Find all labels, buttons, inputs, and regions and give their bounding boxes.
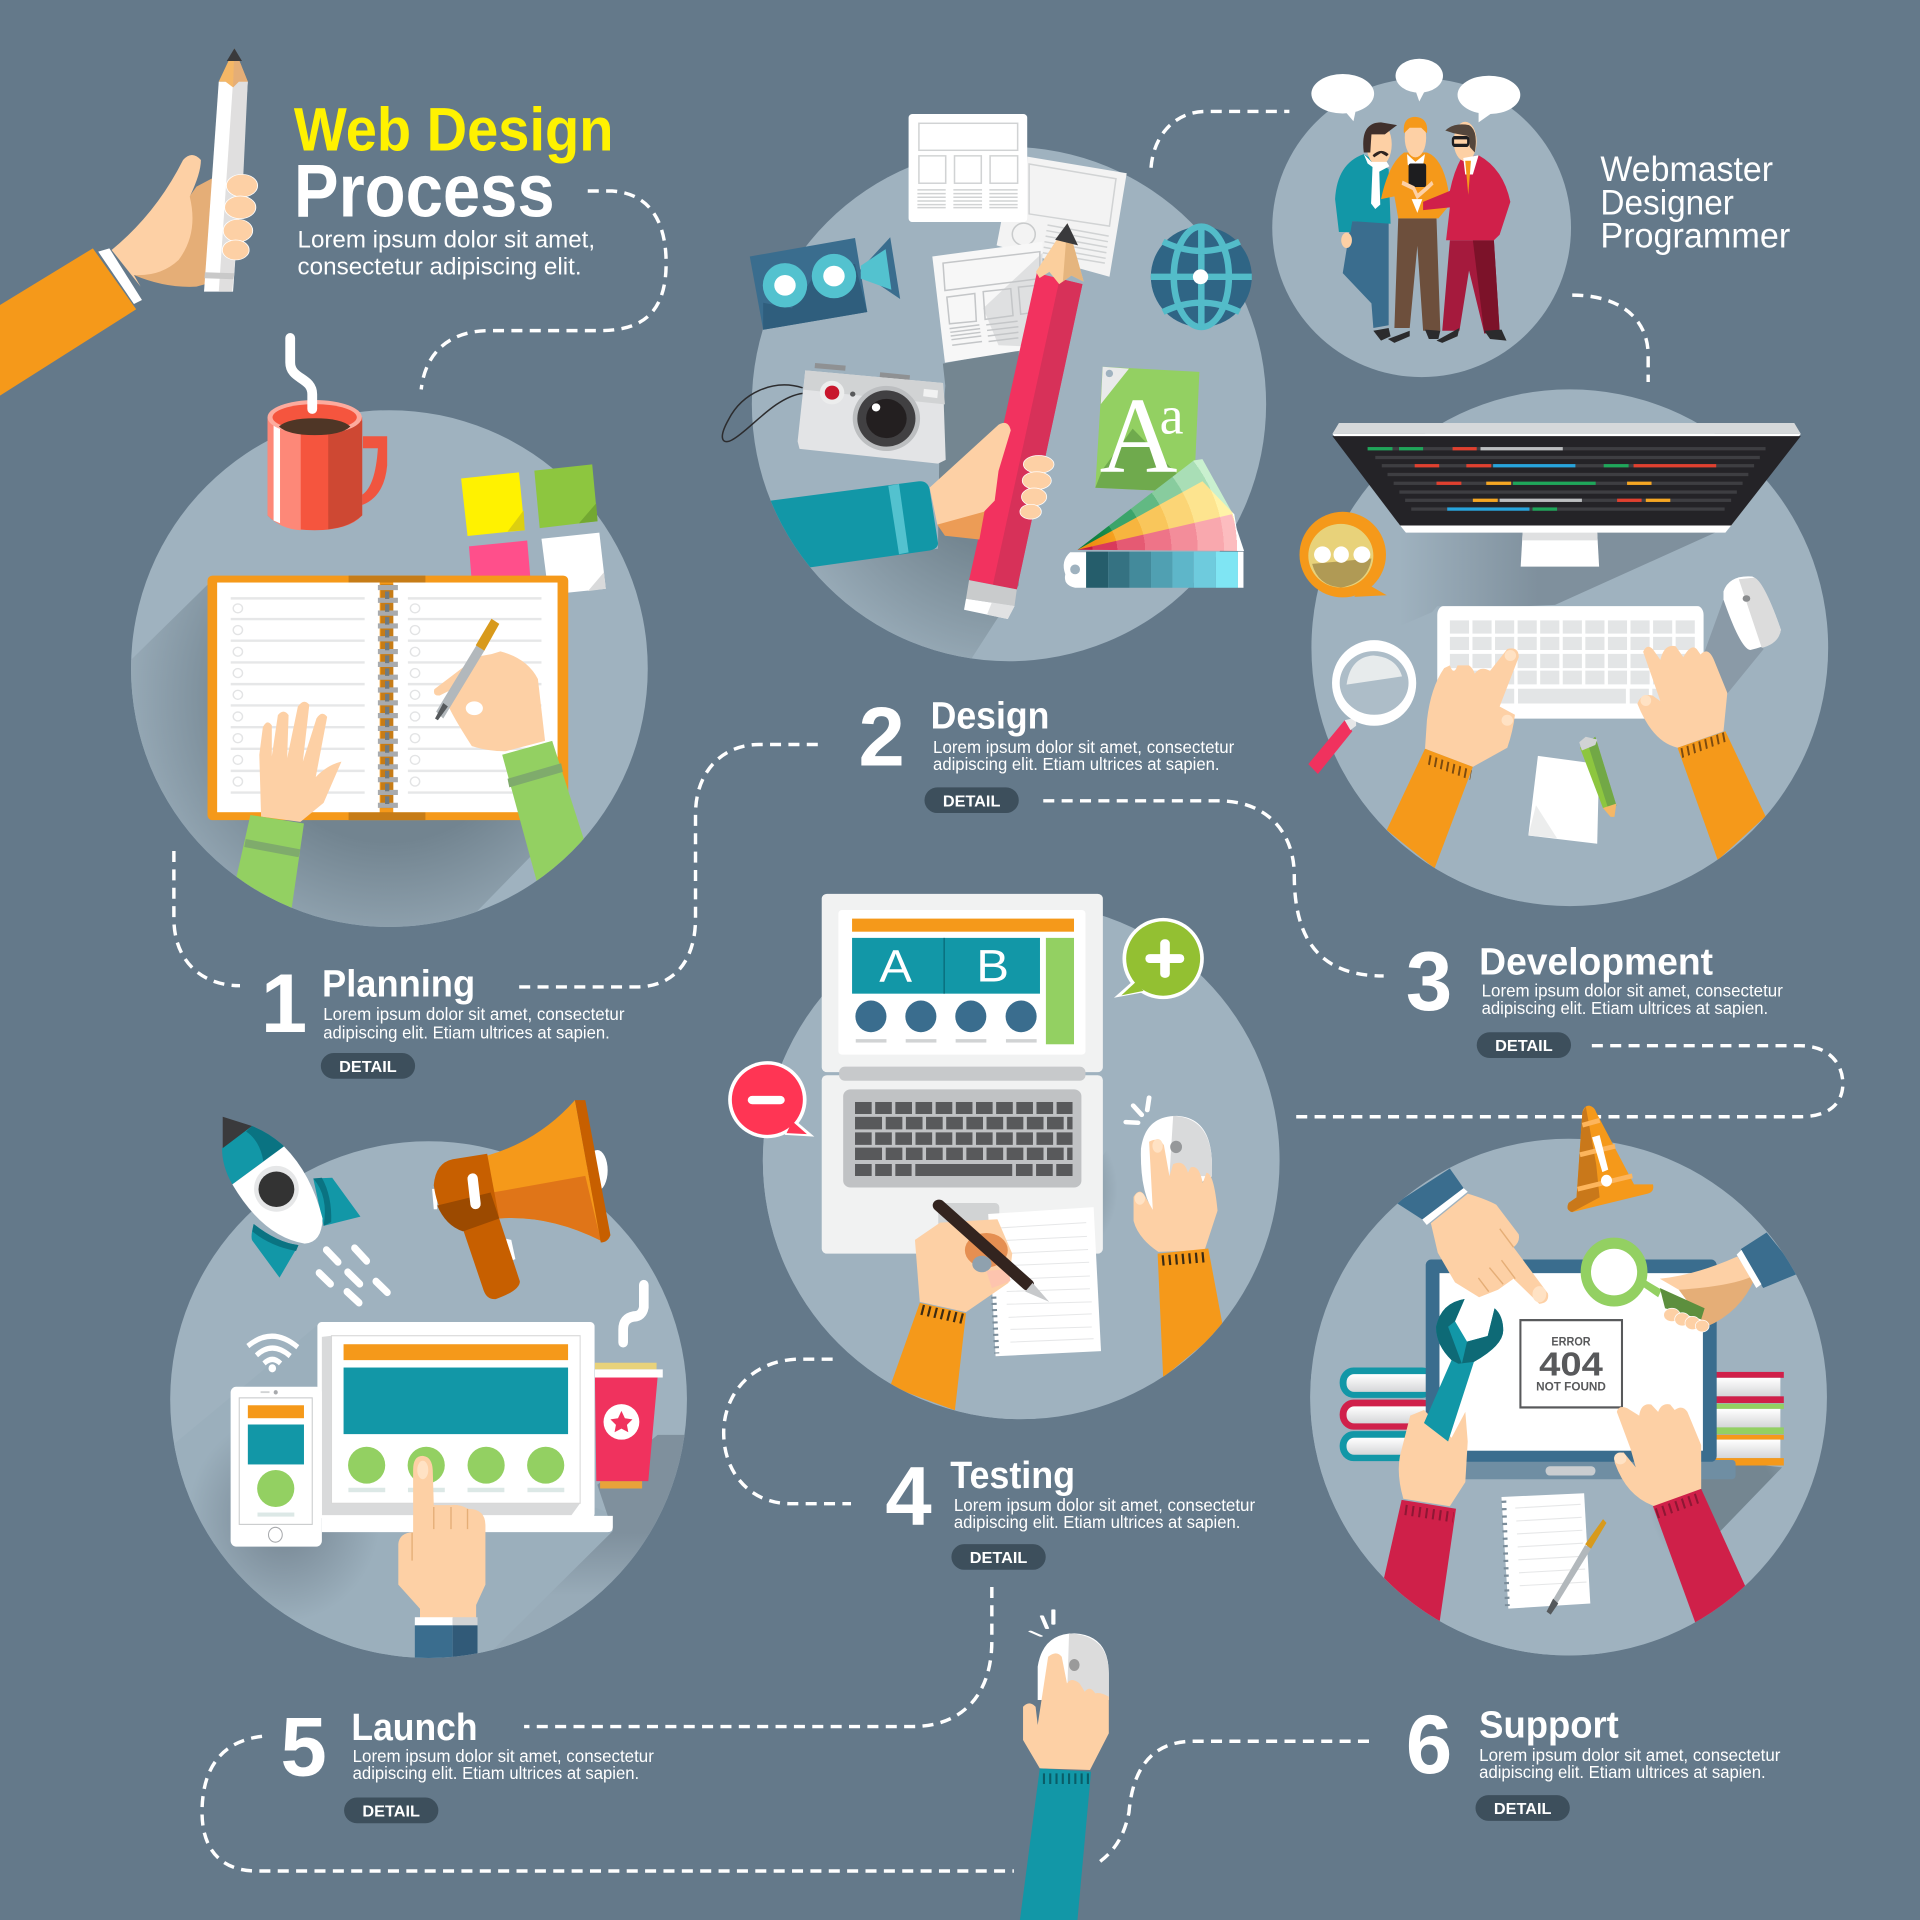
- icon: keyboard: [1437, 606, 1704, 719]
- title: Lorem ipsum dolor sit amet,: [298, 226, 595, 253]
- title: Web Design: [294, 96, 613, 164]
- icon: hand with magnifier: [1586, 1232, 1799, 1332]
- icon: computer mouse: [1723, 576, 1781, 650]
- step 5: launch: adipiscing elit. Etiam ultrices at sapien.: [353, 1763, 639, 1783]
- step 2: design: 2: [858, 690, 905, 783]
- step 6: support: Support: [1479, 1705, 1619, 1747]
- icon: minus bubble: [728, 1061, 814, 1138]
- step 4: testing: DETAIL: [970, 1550, 1028, 1567]
- icon: typography card: [1095, 367, 1199, 495]
- roles text: Programmer: [1600, 215, 1790, 255]
- icon: laptop A/B test: B: [976, 941, 1009, 992]
- icon: pointing hand: [1396, 1168, 1548, 1304]
- icon: typing hands: [1387, 646, 1766, 868]
- step 5: launch: [281, 1701, 654, 1823]
- icon: sticky notes: [461, 464, 606, 595]
- step 2: design: adipiscing elit. Etiam ultrices at sapien.: [933, 754, 1220, 774]
- step 1: planning: Planning: [322, 964, 475, 1006]
- roles text: Webmaster: [1600, 149, 1773, 189]
- icon: pointing hand: [398, 1456, 485, 1659]
- step 3: development: Development: [1479, 942, 1713, 984]
- icon: photo camera: [722, 366, 946, 464]
- icon: right hand and sleeve: [1614, 1404, 1746, 1625]
- long shadow: [1310, 1374, 1782, 1656]
- icon: hand holding pencil: [0, 48, 258, 396]
- icon: rocket: [222, 1117, 387, 1303]
- icon: steam: [290, 338, 312, 409]
- panel: team illustration: [1311, 59, 1520, 343]
- step 2: design: Design: [931, 696, 1049, 738]
- long shadow: [131, 585, 530, 927]
- step 6: support: adipiscing elit. Etiam ultrices at sapien.: [1479, 1762, 1766, 1782]
- icon: laptop with web layout: [317, 1322, 613, 1532]
- title: Process: [294, 149, 555, 233]
- icon: speech bubbles: [1311, 59, 1520, 122]
- icon: bottom hand on mouse: [1020, 1610, 1109, 1920]
- figure: programmer: [1423, 122, 1510, 343]
- icon: typography card: a: [1160, 385, 1184, 445]
- step 2: design: DETAIL: [943, 793, 1001, 810]
- icon: tablet screen: [1426, 1259, 1736, 1479]
- icon: coffee mug: [268, 400, 387, 530]
- step 1: planning: adipiscing elit. Etiam ultrices at sapien.: [323, 1022, 610, 1042]
- panel: planning illustration: [131, 333, 606, 927]
- icon: globe: [1151, 226, 1252, 327]
- step 4: testing: Testing: [950, 1455, 1075, 1497]
- step 5: launch: Launch: [351, 1707, 478, 1749]
- icon: magnifier: [1308, 646, 1412, 774]
- step 1: planning: DETAIL: [339, 1059, 397, 1076]
- step 1: planning: Lorem ipsum dolor sit amet, consectetur: [323, 1004, 625, 1024]
- step 4: testing: 4: [885, 1449, 932, 1542]
- panel: launch illustration: [167, 1100, 687, 1662]
- step 4: testing: adipiscing elit. Etiam ultrices at sapien.: [954, 1512, 1240, 1532]
- step 6: support: [1406, 1698, 1780, 1821]
- icon: paper and green pencil: [1528, 737, 1616, 844]
- icon: laptop A/B test: [822, 894, 1103, 1254]
- step 1: planning: 1: [261, 957, 307, 1050]
- icon: stacked books: [1340, 1367, 1784, 1466]
- icon: left hand and sleeve: [236, 702, 341, 910]
- dashed connectors: [174, 111, 1843, 1871]
- 404 error text: ERROR: [1551, 1335, 1591, 1349]
- icon: coffee cup: [595, 1285, 663, 1488]
- icon: desktop monitor: [1332, 423, 1801, 567]
- panel: circle backdrops: [131, 78, 1828, 1658]
- long shadow: [762, 1054, 1110, 1420]
- title: [294, 96, 613, 280]
- step 6: support: DETAIL: [1494, 1801, 1552, 1818]
- icon: traffic cone: [1567, 1106, 1653, 1212]
- figure: designer: [1381, 117, 1450, 343]
- icon: megaphone: [432, 1100, 610, 1299]
- icon: mouse and hand: [1126, 1098, 1223, 1378]
- step 3: development: Lorem ipsum dolor sit amet, consectetur: [1482, 981, 1783, 1001]
- icon: chat bubble: [1300, 512, 1387, 597]
- icon: wireframe sheets: [909, 114, 1127, 363]
- step 3: development: DETAIL: [1495, 1038, 1553, 1055]
- panel: testing illustration: [728, 894, 1223, 1420]
- long shadows: [1308, 525, 1764, 901]
- icon: notepad and pen: [1501, 1493, 1606, 1615]
- long shadow: [811, 349, 1019, 661]
- icon: hand with wrench: [1383, 1299, 1503, 1623]
- icon: spiral notebook: [208, 576, 568, 820]
- step 5: launch: DETAIL: [362, 1804, 420, 1821]
- step 2: design: [858, 690, 1234, 813]
- icon: plus bubble: [1114, 918, 1204, 999]
- icon: wifi: [248, 1336, 298, 1370]
- step 3: development: adipiscing elit. Etiam ultrices at sapien.: [1482, 998, 1768, 1018]
- icon: big pencil: [964, 223, 1084, 619]
- icon: writing hand: [890, 1205, 1049, 1410]
- roles text: Designer: [1600, 182, 1734, 222]
- step 3: development: [1406, 935, 1783, 1058]
- 404 error text: NOT FOUND: [1536, 1379, 1606, 1393]
- step 4: testing: Lorem ipsum dolor sit amet, consectetur: [954, 1495, 1255, 1515]
- panel: development illustration: [1300, 423, 1801, 901]
- icon: writing hand with pen: [434, 619, 584, 886]
- long shadows: [174, 1434, 684, 1658]
- 404 error text: [1536, 1335, 1606, 1393]
- icon: hand holding pencil: [757, 423, 1054, 571]
- step 3: development: 3: [1406, 935, 1452, 1028]
- step 1: planning: [261, 957, 625, 1079]
- step 5: launch: Lorem ipsum dolor sit amet, consectetur: [353, 1746, 654, 1766]
- icon: laptop A/B test: A: [879, 941, 912, 992]
- icon: video camera: [750, 237, 900, 330]
- roles text: [1600, 149, 1790, 255]
- icon: colour fan: [1064, 459, 1244, 588]
- 404 error text: 404: [1539, 1347, 1604, 1384]
- icon: smartphone: [231, 1387, 322, 1547]
- step 5: launch: 5: [281, 1701, 327, 1794]
- step 6: support: Lorem ipsum dolor sit amet, consectetur: [1479, 1745, 1780, 1765]
- step 2: design: Lorem ipsum dolor sit amet, consectetur: [933, 737, 1234, 757]
- step 6: support: 6: [1406, 1698, 1452, 1791]
- panel: support illustration: [1307, 1106, 1799, 1656]
- panel: design illustration: [722, 114, 1252, 661]
- icon: notepad: [988, 1207, 1101, 1356]
- figure: webmaster: [1335, 122, 1397, 341]
- title: consectetur adipiscing elit.: [298, 253, 582, 280]
- step 4: testing: [885, 1449, 1255, 1570]
- icon: typography card: A: [1100, 376, 1178, 495]
